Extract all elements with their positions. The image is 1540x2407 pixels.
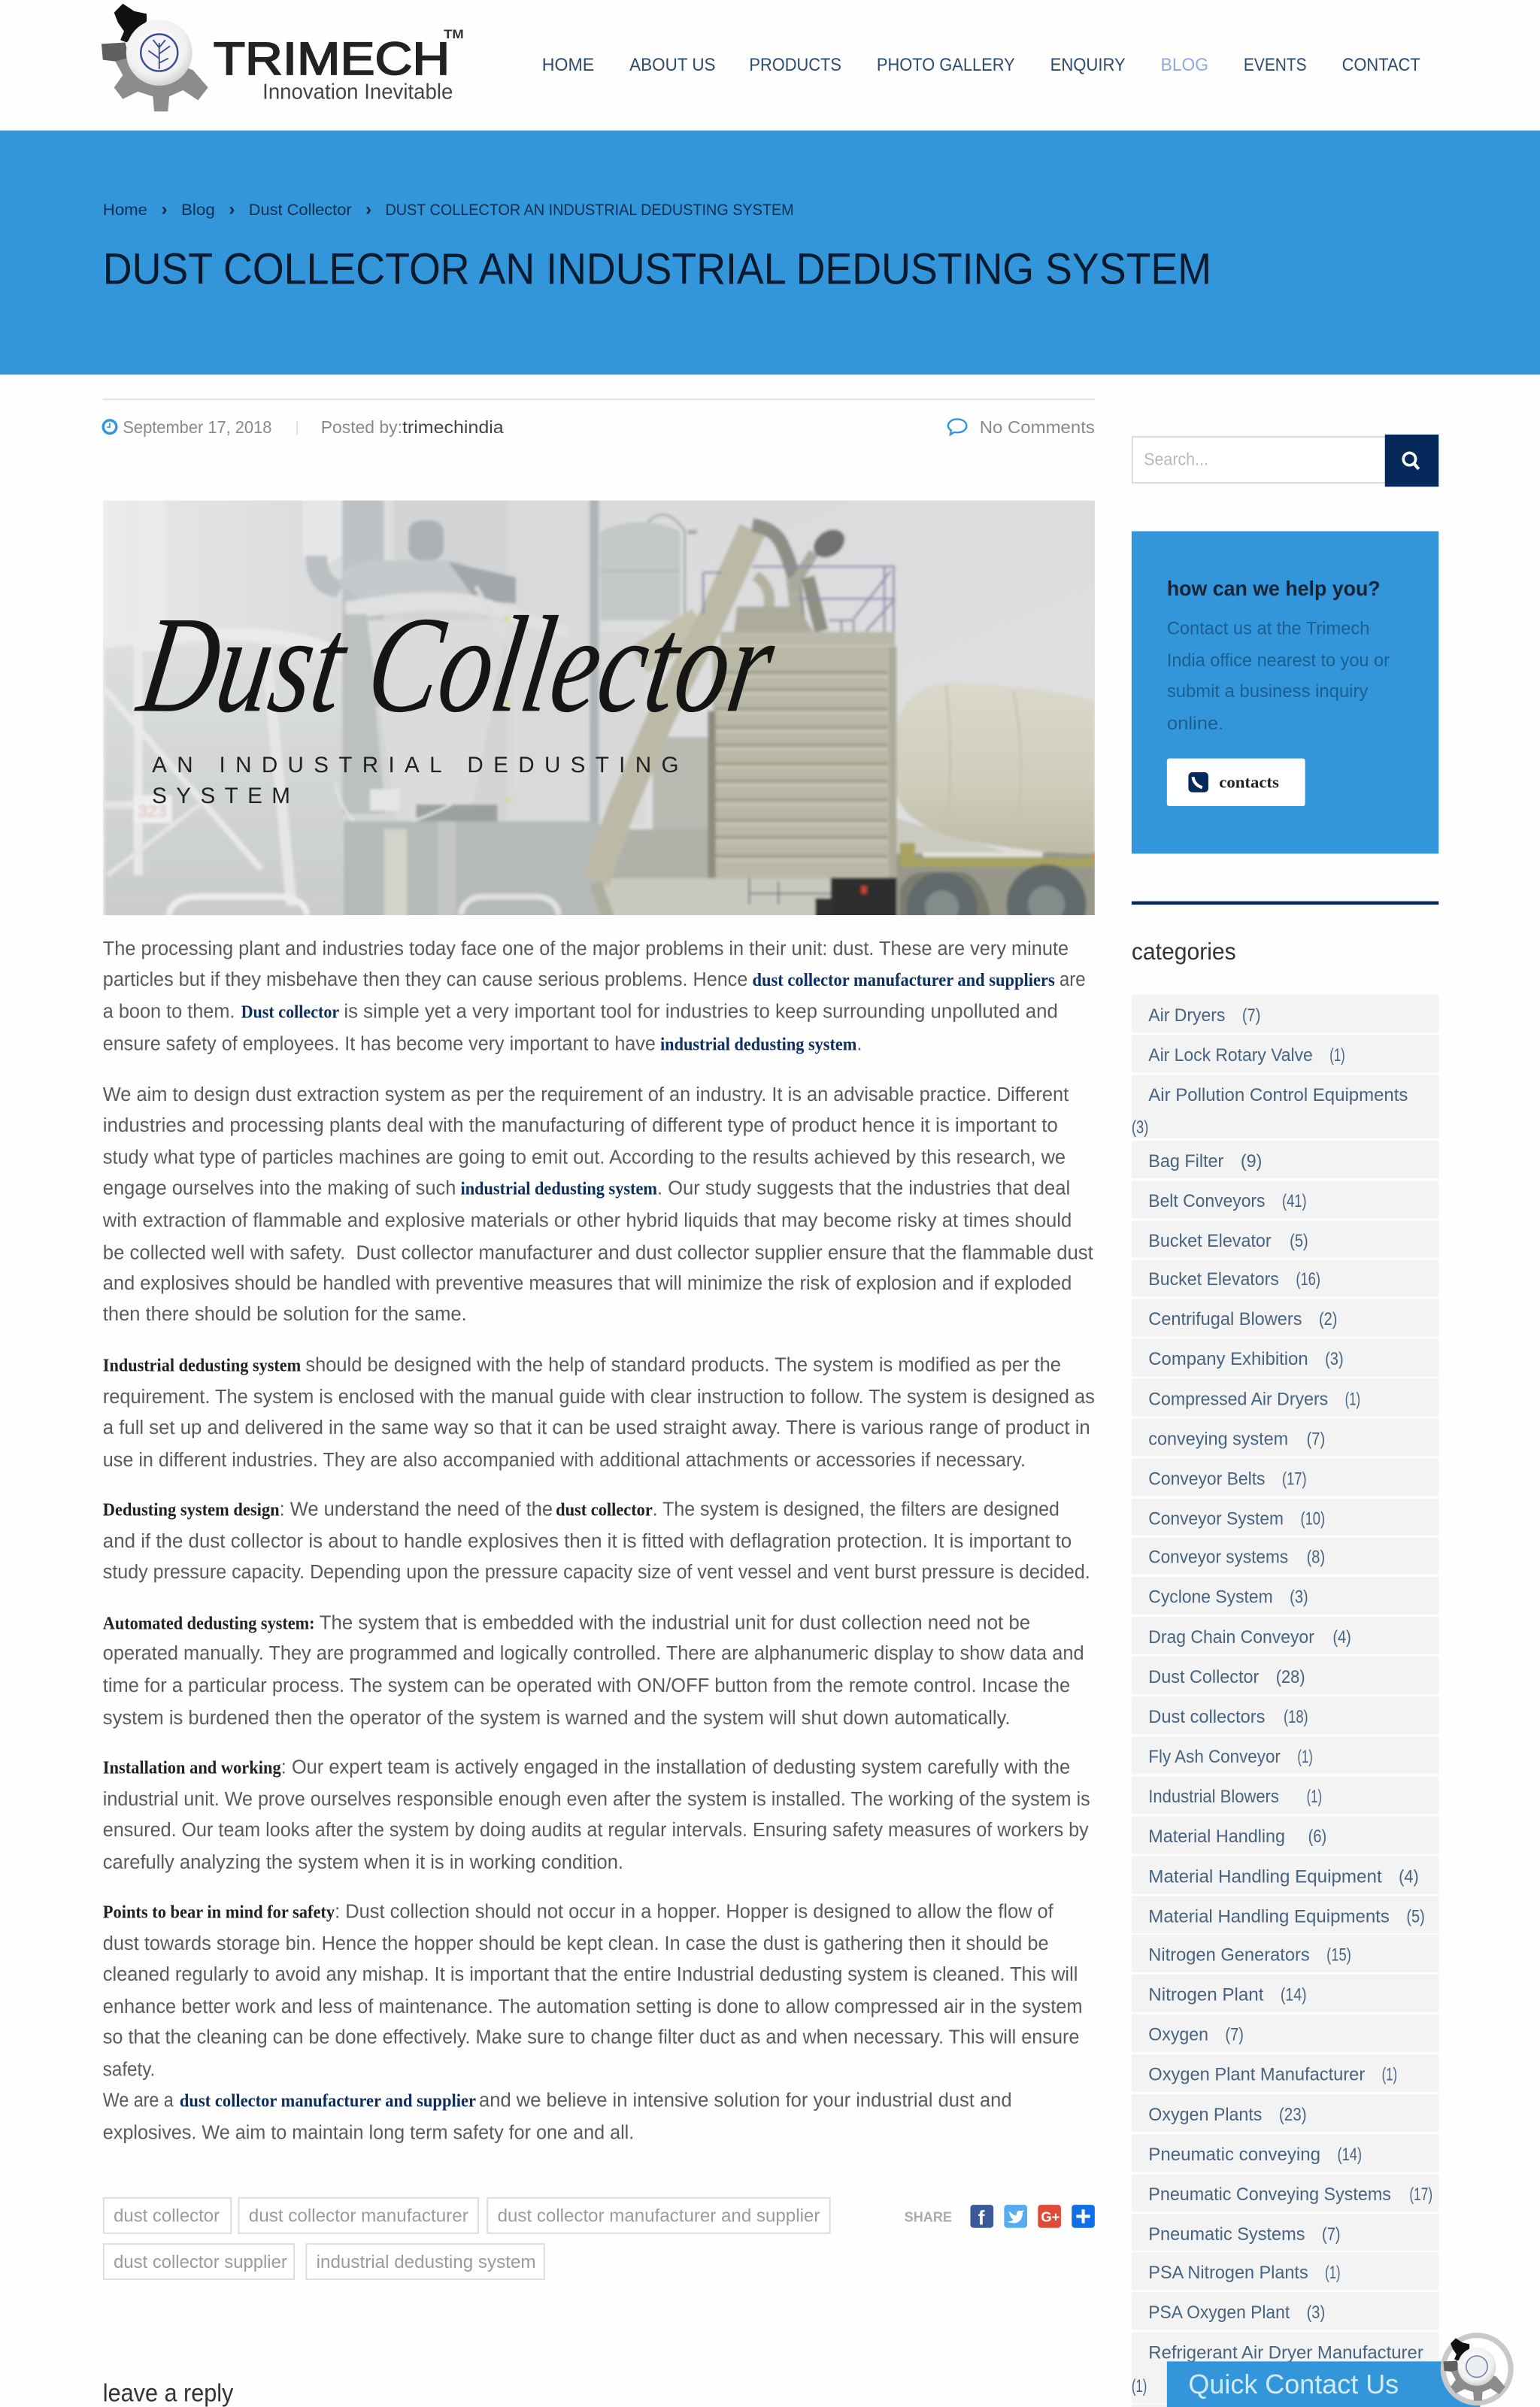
row Bucket Elevators [1132,1260,1438,1296]
article paragraph 5: operated manually. They are programmed and logically controlled. There are alphanumeric display to show data and [103,1643,1084,1664]
row PSA Oxygen Plant: PSA Oxygen Plant [1148,2303,1290,2323]
row PSA Nitrogen Plants: PSA Nitrogen Plants [1148,2263,1308,2283]
article paragraph 4: Dedusting system design [103,1499,280,1520]
row Dust collectors: (18) [1284,1708,1308,1727]
row Conveyor Belts [1132,1459,1438,1496]
article paragraph 4: : We understand the need of the [280,1499,553,1520]
post tags: dust collector manufacturer and supplier [498,2207,820,2227]
article paragraph 3: a full set up and delivered in the same way so that it can be used straight away. There is various range of product in [103,1417,1090,1438]
row Centrifugal Blowers [1132,1299,1438,1336]
reply heading: leave a reply [103,2379,233,2407]
row Conveyor System: Conveyor System [1148,1510,1284,1529]
categories heading [1132,902,1438,965]
mixer drum [896,684,1095,853]
rear silo [600,522,681,620]
row Bucket Elevators: Bucket Elevators [1148,1270,1279,1290]
panel: help box: how can we help you? [1167,577,1381,600]
article paragraph 3: should be designed with the help of standard products. The system is modified as per the [305,1354,1061,1375]
article paragraph 1: industrial dedusting system [660,1035,856,1055]
row Pneumatic Conveying Systems: Pneumatic Conveying Systems [1148,2185,1391,2205]
row Nitrogen Generators [1132,1935,1438,1972]
article paragraph 5 [103,1612,1084,1729]
row Oxygen Plants: Oxygen Plants [1148,2105,1262,2125]
row Oxygen Plant Manufacturer: Oxygen Plant Manufacturer [1148,2066,1365,2085]
row Oxygen: (7) [1225,2026,1244,2045]
article paragraph 6: industrial unit. We prove ourselves responsible enough even after the system is installed. The working of the system is [103,1789,1090,1810]
row Air Dryers [1132,995,1438,1032]
breadcrumb: › [161,199,168,220]
article paragraph 4: and if the dust collector is about to handle explosives then it is fitted with deflagration protection. It is important to [103,1531,1072,1552]
post tags [104,2198,830,2279]
logo: Trimech gear and wordmark: TRIMECH [214,33,450,84]
truck chassis [923,852,1042,857]
photo caption: subtitle: AN INDUSTRIAL DEDUSTING [152,753,679,778]
row Dust collectors [1132,1696,1438,1734]
row Material Handling Equipments: (5) [1406,1907,1425,1927]
railing [703,566,895,641]
row Material Handling Equipment: Material Handling Equipment [1148,1867,1382,1887]
article paragraph 2: study what type of particles machines are going to emit out. According to the results achieved by this research, we [103,1147,1066,1169]
article paragraph 7: : Dust collection should not occur in a hopper. Hopper is designed to allow the flow of [335,1901,1054,1922]
contacts button [1167,759,1305,806]
row Pneumatic conveying [1132,2134,1438,2172]
post tags: dust collector supplier [114,2253,287,2272]
tall silo [345,652,505,820]
icon: clock [103,420,117,433]
contacts button: contacts [1219,772,1279,791]
article paragraph 6 [103,1757,1090,1873]
icon: comment bubble [948,419,966,435]
breadcrumb: › [365,199,371,220]
row Fly Ash Conveyor: (1) [1297,1748,1313,1767]
post meta: trimechindia [402,417,504,437]
article paragraph 3: requirement. The system is enclosed with the manual guide with clear instruction to follow. The system is designed as [103,1387,1095,1408]
article paragraph 6: ensured. Our team looks after the system by doing audits at regular intervals. Ensuring safety measures of workers by [103,1820,1089,1841]
row Air Pollution Control Equipments [1132,1075,1438,1138]
categories heading: categories [1132,938,1236,965]
article paragraph 1: a boon to them. [103,1002,235,1023]
article paragraph 5: time for a particular process. The system can be operated with ON/OFF button from the remote control. Incase the [103,1675,1070,1696]
row Air Pollution Control Equipments: (3) [1132,1118,1148,1138]
row Cyclone System: (3) [1290,1588,1308,1608]
row Dust Collector [1132,1657,1438,1694]
row Dust Collector: (28) [1276,1668,1305,1687]
row Compressed Air Dryers: Compressed Air Dryers [1148,1390,1328,1409]
row Conveyor Belts: Conveyor Belts [1148,1469,1266,1489]
row Belt Conveyors [1132,1181,1438,1218]
share icons: f [978,2207,985,2230]
gauge sign [134,796,172,823]
article paragraph 2: industrial dedusting system [461,1179,657,1199]
row PSA Oxygen Plant [1132,2292,1438,2330]
row conveying system: (7) [1307,1429,1325,1449]
row Industrial Blowers: (1) [1307,1787,1322,1807]
row Fly Ash Conveyor: Fly Ash Conveyor [1148,1748,1281,1767]
share icons [905,2205,1095,2230]
row Oxygen Plants [1132,2094,1438,2132]
post meta [103,399,1095,437]
quick contact bar [1167,2336,1511,2407]
logo: Trimech gear and wordmark: Innovation Inevitable [262,80,453,105]
truck body under drum [896,852,1096,921]
breadcrumb: › [229,199,235,220]
post meta: Posted by: [321,417,402,437]
pole [590,491,599,921]
row Oxygen Plants: (23) [1279,2105,1307,2125]
article paragraph 1: is simple yet a very important tool for industries to keep surrounding unpolluted and [344,1002,1058,1023]
row Belt Conveyors: (41) [1282,1192,1307,1211]
article paragraph 7: and we believe in intensive solution for your industrial dust and [479,2090,1012,2111]
row Air Lock Rotary Valve [1132,1035,1438,1072]
ground [602,877,833,915]
row Refrigerant Air Dryer Manufacturer: (1) [1132,2377,1147,2396]
row Nitrogen Plant [1132,1975,1438,2012]
photo scene: 323 [138,802,166,820]
article paragraph 4: study pressure capacity. Depending upon the pressure capacity size of vent vessel and vent burst pressure is decided. [103,1562,1090,1583]
row Air Dryers: Air Dryers [1148,1006,1225,1026]
navigation menu: ABOUT US [629,55,716,75]
row Nitrogen Plant: Nitrogen Plant [1148,1986,1264,2005]
row Bag Filter: Bag Filter [1148,1152,1223,1172]
article paragraph 2: engage ourselves into the making of such [103,1178,456,1199]
ducts [638,622,700,660]
row Bag Filter [1132,1141,1438,1178]
row PSA Nitrogen Plants: (1) [1325,2263,1341,2283]
article paragraph 7: explosives. We aim to maintain long term safety for one and all. [103,2122,634,2143]
hopper-side duct base [651,735,710,830]
row Pneumatic Systems: Pneumatic Systems [1148,2225,1305,2245]
panel: categories list [1132,995,1438,2407]
article paragraph 7: Points to bear in mind for safety [103,1902,335,1922]
row Dust collectors: Dust collectors [1148,1708,1266,1727]
icon: round logo badge [1443,2336,1511,2402]
row Material Handling: Material Handling [1148,1827,1285,1847]
breadcrumb [103,199,794,220]
article paragraph 5: The system that is embedded with the industrial unit for dust collection need not be [320,1612,1030,1633]
title banner [0,131,1540,374]
article paragraph 2: then there should be solution for the same. [103,1304,467,1325]
row Refrigerant Air Dryer Manufacturer: Refrigerant Air Dryer Manufacturer [1148,2343,1423,2363]
row Conveyor systems: (8) [1307,1548,1325,1568]
breadcrumb: Blog [181,202,215,219]
row conveying system: conveying system [1148,1429,1288,1449]
share icons: SHARE [905,2209,952,2225]
header [0,0,1540,131]
post tags: dust collector [114,2207,220,2227]
row Bucket Elevator [1132,1220,1438,1257]
article paragraph 7: We are a [103,2090,174,2111]
white lower building [599,821,602,826]
row Oxygen Plant Manufacturer [1132,2054,1438,2092]
row Fly Ash Conveyor [1132,1736,1438,1774]
row Belt Conveyors: Belt Conveyors [1148,1192,1266,1211]
row Material Handling Equipment: (4) [1399,1867,1419,1887]
article paragraph 6: : Our expert team is actively engaged in the installation of dedusting system carefully with the [281,1757,1070,1778]
panel: help box: submit a business inquiry [1167,681,1369,702]
featured photo: dust collector plant: SYSTEM [152,784,290,808]
row Material Handling Equipments [1132,1896,1438,1933]
post tags: dust collector manufacturer [249,2207,468,2227]
article paragraph 3: use in different industries. They are also accompanied with additional attachments or accessories if necessary. [103,1450,1026,1471]
louvered box [720,632,895,646]
row Pneumatic Systems [1132,2214,1438,2251]
search box: Search... [1144,450,1208,469]
row Nitrogen Generators: (15) [1326,1945,1351,1965]
article paragraph 1: dust collector manufacturer and suppliers [753,970,1055,990]
row Nitrogen Generators: Nitrogen Generators [1148,1945,1310,1965]
article paragraph 4: . The system is designed, the filters are designed [653,1499,1060,1520]
article paragraph 5: system is burdened then the operator of the system is warned and the system will shut down automatically. [103,1708,1011,1729]
row Material Handling Equipments: Material Handling Equipments [1148,1907,1390,1927]
article paragraph 2 [102,1084,1093,1325]
panel: help box [1132,531,1438,853]
article paragraph 7: cleaned regularly to avoid any mishap. It is important that the entire Industrial dedusting system is cleaned. This will [103,1964,1078,1985]
row Conveyor systems [1132,1538,1438,1575]
article paragraph 7: so that the cleaning can be done effectively. Make sure to change filter duct as and when necessary. This will ensure [103,2027,1079,2048]
navigation menu: CONTACT [1342,55,1420,75]
article paragraph 4 [103,1499,1090,1583]
article paragraph 2: with extraction of flammable and explosive materials or other hybrid liquids that may become risky at times should [102,1210,1072,1231]
article paragraph 1: Dust collector [241,1002,339,1023]
row Industrial Blowers: Industrial Blowers [1148,1787,1279,1807]
navigation menu: PRODUCTS [749,55,841,75]
row Oxygen [1132,2014,1438,2052]
article paragraph 2: and explosives should be handled with preventive measures that will minimize the risk of explosion and if exploded [103,1273,1072,1294]
article paragraph 7: safety. [103,2060,155,2081]
featured photo: dust collector plant [102,501,1095,915]
post meta: September 17, 2018 [123,417,271,437]
row Material Handling [1132,1817,1438,1854]
truck rear [831,878,896,923]
lower left cone [105,629,341,660]
row Material Handling Equipment [1132,1857,1438,1894]
article paragraph 7 [103,1901,1083,2143]
article paragraph 5: Automated dedusting system: [103,1613,315,1633]
navigation menu: EVENTS [1244,55,1307,75]
article paragraph 2: We aim to design dust extraction system as per the requirement of an industry. It is an advisable practice. Different [103,1084,1069,1105]
article paragraph 2: industries and processing plants deal with the manufacturing of different type of product hence it is important to [103,1115,1058,1136]
article paragraph 2: be collected well with safety. Dust collector manufacturer and dust collector supplier ensure that the flammable dust [103,1242,1093,1263]
article paragraph 6: Installation and working [103,1757,281,1778]
article paragraph 4: dust collector [556,1499,653,1520]
page title: DUST COLLECTOR AN INDUSTRIAL DEDUSTING SYSTEM [103,245,1211,294]
row Conveyor System [1132,1499,1438,1535]
row Air Lock Rotary Valve: Air Lock Rotary Valve [1148,1046,1313,1066]
row Oxygen: Oxygen [1148,2026,1208,2045]
row Pneumatic conveying: Pneumatic conveying [1148,2145,1320,2165]
article paragraph 1: particles but if they misbehave then they can cause serious problems. Hence [103,969,747,990]
photo scene [102,501,1095,915]
row Conveyor systems: Conveyor systems [1148,1548,1288,1568]
row Air Pollution Control Equipments: Air Pollution Control Equipments [1148,1086,1408,1105]
pale left silo [104,501,229,637]
row conveying system [1132,1419,1438,1457]
row Compressed Air Dryers [1132,1379,1438,1417]
breadcrumb: Dust Collector [249,202,352,219]
article paragraph 7: dust towards storage bin. Hence the hopper should be kept clean. In case the dust is gathering then it should be [103,1933,1049,1954]
row Bucket Elevator: Bucket Elevator [1148,1232,1272,1251]
row Compressed Air Dryers: (1) [1345,1390,1360,1409]
article paragraph 1: The processing plant and industries today face one of the major problems in their unit: dust. These are very minute [103,938,1069,959]
row Cyclone System: Cyclone System [1148,1588,1273,1608]
article paragraph 2: . Our study suggests that the industries that deal [657,1178,1070,1199]
article paragraph 7: dust collector manufacturer and supplier [180,2090,476,2111]
breadcrumb: Home [103,202,147,219]
article paragraph 1: ensure safety of employees. It has become very important to have [103,1034,656,1055]
row PSA Oxygen Plant: (3) [1307,2303,1325,2323]
post tags: industrial dedusting system [317,2253,536,2272]
navigation menu: HOME [542,55,594,75]
row Bucket Elevators: (16) [1296,1270,1320,1290]
row Material Handling: (6) [1308,1827,1326,1847]
logo: Trimech gear and wordmark [102,4,464,111]
article paragraph 3 [103,1354,1095,1471]
row Conveyor System: (10) [1300,1510,1325,1529]
quick contact bar: Quick Contact Us [1188,2369,1399,2399]
search box [1132,435,1438,487]
row Refrigerant Air Dryer Manufacturer [1132,2333,1438,2402]
row Industrial Blowers [1132,1776,1438,1814]
article paragraph 1: are [1060,969,1086,990]
article paragraph 6: carefully analyzing the system when it is in working condition. [103,1852,623,1873]
navigation menu: ENQUIRY [1050,55,1126,75]
panel: help box: online. [1167,714,1223,734]
row Drag Chain Conveyor [1132,1617,1438,1654]
article paragraph 7: enhance better work and less of maintenance. The automation setting is done to allow compressed air in the system [103,1996,1083,2017]
row Air Dryers: (7) [1242,1006,1260,1026]
row Pneumatic Systems: (7) [1322,2225,1341,2245]
row Company Exhibition [1132,1338,1438,1377]
panel: help box: India office nearest to you or [1167,650,1390,671]
row Bucket Elevator: (5) [1290,1232,1308,1251]
row Pneumatic conveying: (14) [1337,2145,1362,2165]
article paragraph 1 [103,938,1086,1055]
row Bag Filter: (9) [1241,1152,1262,1172]
row Cyclone System [1132,1577,1438,1614]
navigation menu: BLOG [1161,55,1208,75]
logo: Trimech gear and wordmark: TM [444,28,464,41]
row Oxygen Plant Manufacturer: (1) [1382,2066,1397,2085]
breadcrumb: DUST COLLECTOR AN INDUSTRIAL DEDUSTING SYSTEM [386,202,794,219]
row Company Exhibition: Company Exhibition [1148,1350,1308,1369]
post meta: No Comments [980,417,1095,437]
share icons: G+ [1041,2209,1060,2225]
row PSA Nitrogen Plants [1132,2252,1438,2290]
row Air Lock Rotary Valve: (1) [1329,1046,1345,1066]
row Drag Chain Conveyor: (4) [1332,1628,1351,1648]
row Company Exhibition: (3) [1325,1350,1344,1369]
row Dust Collector: Dust Collector [1148,1668,1259,1687]
article paragraph 1: . [856,1034,862,1055]
article paragraph 3: Industrial dedusting system [103,1355,301,1375]
row Centrifugal Blowers: (2) [1319,1310,1337,1329]
navigation menu: PHOTO GALLERY [877,55,1015,75]
hopper [344,821,602,921]
panel: help box: Contact us at the Trimech [1167,618,1369,638]
row Centrifugal Blowers: Centrifugal Blowers [1148,1310,1302,1329]
row Nitrogen Plant: (14) [1281,1986,1307,2005]
row Drag Chain Conveyor: Drag Chain Conveyor [1148,1628,1314,1648]
photo caption: script title: Dust Collector [129,587,785,741]
row Pneumatic Conveying Systems: (17) [1409,2185,1432,2205]
row Conveyor Belts: (17) [1282,1469,1307,1489]
row Pneumatic Conveying Systems [1132,2174,1438,2211]
navigation menu [542,55,1420,75]
